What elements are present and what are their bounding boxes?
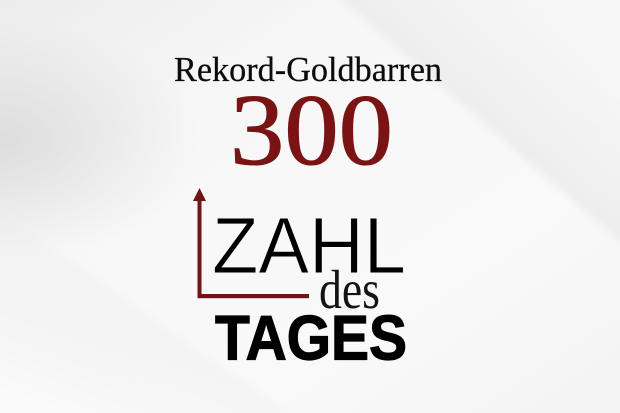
headline: Rekord-Goldbarren: Rekord-Goldbarren: [174, 50, 442, 89]
icon: red chart-axis arrow: [193, 188, 309, 298]
number: 300: 300: [230, 74, 393, 187]
logo word: TAGES: TAGES: [215, 304, 407, 374]
logo word: ZAHL: ZAHL: [212, 201, 406, 290]
logo word: des: des: [319, 259, 380, 320]
